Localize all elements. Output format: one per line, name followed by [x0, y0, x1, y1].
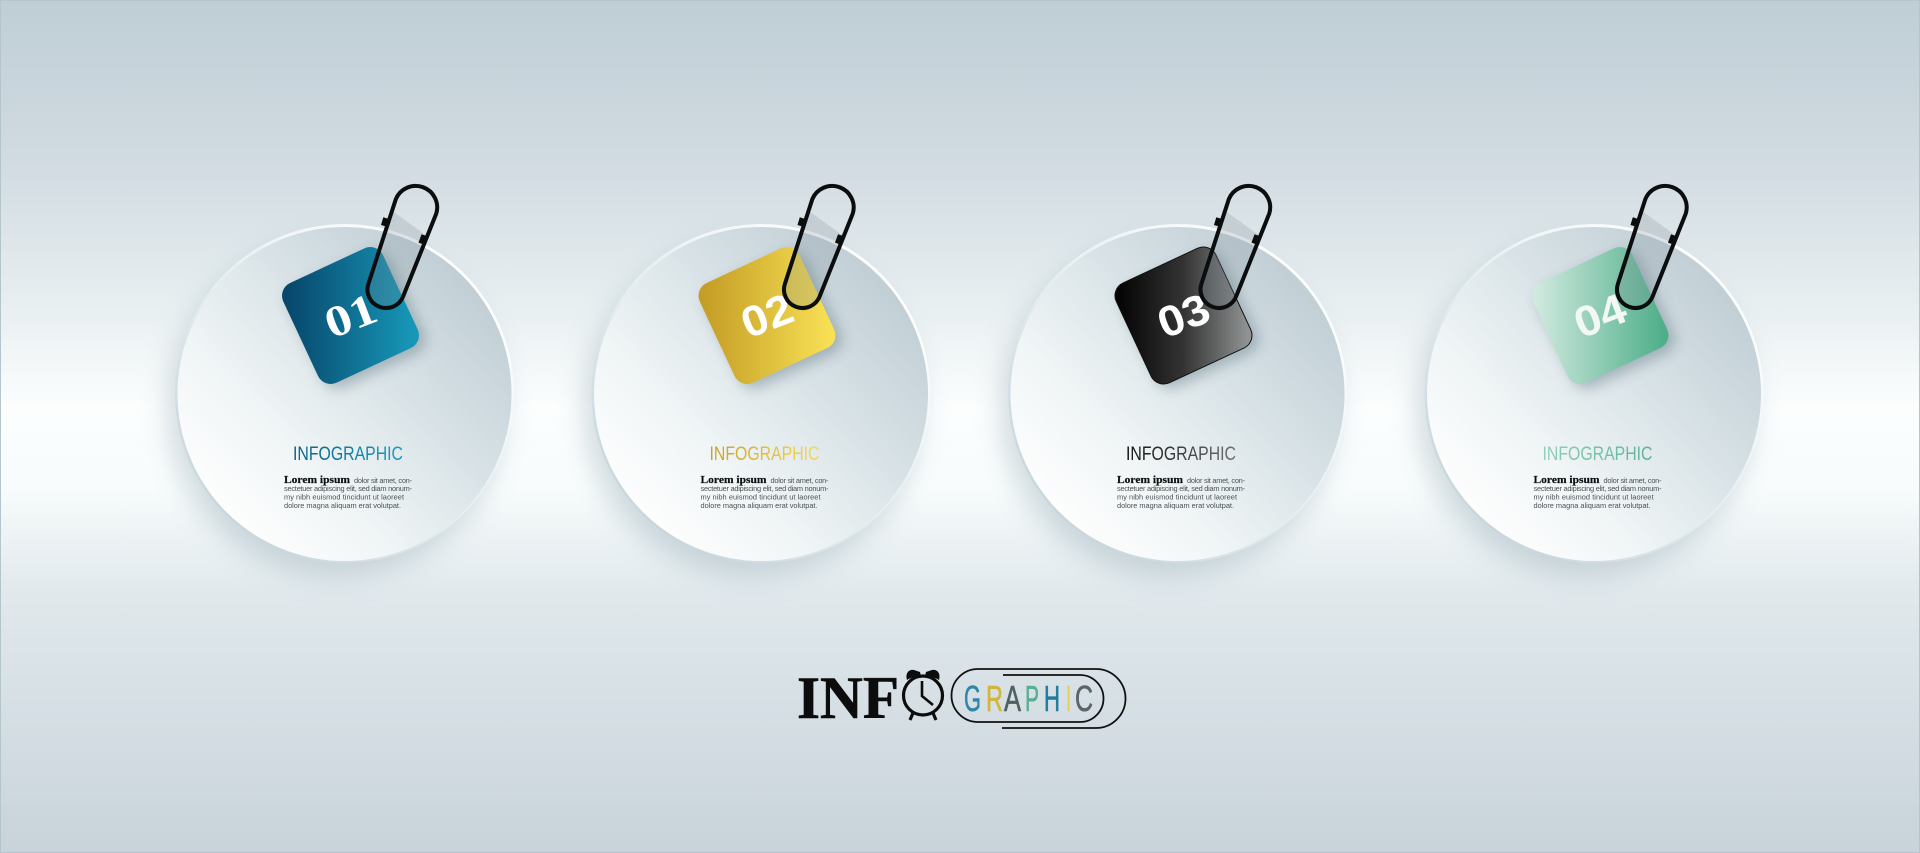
- step 2 body text: dolor sit amet, con-: [770, 476, 829, 485]
- step 3 panel: [1001, 186, 1347, 576]
- step 3 heading: INFOGRAPHIC: [1126, 443, 1236, 465]
- logo word GRAPHIC: A: [1004, 678, 1021, 719]
- bottom logo: [797, 665, 1126, 731]
- step 3 body text: dolor sit amet, con-: [1187, 476, 1246, 485]
- step 2 number: 02: [734, 285, 800, 348]
- step 3 paperclip: [1200, 186, 1270, 308]
- step 1 body text: my nibh euismod tincidunt ut laoreet: [284, 492, 404, 502]
- step 1 paperclip: [367, 186, 437, 308]
- step 1 body text: [284, 475, 413, 510]
- step 4 disc: [1424, 224, 1764, 563]
- step 4 paperclip: [1617, 186, 1687, 308]
- step 4 heading: INFOGRAPHIC: [1542, 443, 1652, 465]
- step 2 paperclip: [784, 186, 854, 308]
- step 1 heading: INFOGRAPHIC: [293, 443, 403, 465]
- step 1 body text: dolor sit amet, con-: [354, 476, 413, 485]
- logo word GRAPHIC: R: [986, 678, 1003, 719]
- step 3 disc: [1008, 224, 1347, 563]
- step 1 body text: dolore magna aliquam erat volutpat.: [284, 501, 401, 510]
- step 3 body text: [1117, 475, 1246, 510]
- step 3 body text: dolore magna aliquam erat volutpat.: [1117, 501, 1234, 510]
- step 3 number: 03: [1151, 285, 1217, 348]
- step 2 heading: INFOGRAPHIC: [710, 443, 820, 465]
- logo word GRAPHIC: [964, 678, 1093, 719]
- step 2 disc: [592, 224, 930, 563]
- step 2 number tile: [694, 241, 847, 395]
- logo word GRAPHIC: H: [1044, 678, 1060, 719]
- step 4 body text: dolore magna aliquam erat volutpat.: [1534, 501, 1650, 510]
- step 1 disc: [175, 224, 514, 563]
- step 3 body text: sectetuer adipiscing elit, sed diam nonum-: [1117, 484, 1246, 493]
- step 1 number tile: [277, 241, 430, 395]
- step 4 body text: [1534, 475, 1662, 510]
- step 4 body text: Lorem ipsum: [1534, 475, 1600, 486]
- step 4 body text: sectetuer adipiscing elit, sed diam nonum-: [1534, 484, 1662, 493]
- logo word INF: INF: [797, 665, 899, 731]
- step 3 body text: Lorem ipsum: [1117, 475, 1184, 486]
- step 4 number: 04: [1567, 285, 1633, 348]
- step 2 body text: dolore magna aliquam erat volutpat.: [700, 501, 818, 510]
- icon: large paperclip outline: [952, 669, 1126, 728]
- icon: alarm clock: [904, 670, 942, 720]
- logo word GRAPHIC: P: [1025, 678, 1039, 719]
- step 2 body text: my nibh euismod tincidunt ut laoreet: [700, 492, 820, 502]
- logo word GRAPHIC: G: [964, 678, 981, 719]
- step 3 body text: my nibh euismod tincidunt ut laoreet: [1117, 492, 1237, 502]
- step 2 body text: sectetuer adipiscing elit, sed diam nonum-: [700, 484, 829, 493]
- step 2 panel: [584, 186, 930, 576]
- step 3 number tile: [1110, 241, 1263, 395]
- step 1 body text: Lorem ipsum: [284, 475, 351, 486]
- step 1 number: 01: [318, 284, 384, 348]
- step 2 body text: [700, 475, 829, 510]
- step 1 panel: [168, 186, 514, 576]
- logo word GRAPHIC: I: [1066, 678, 1071, 719]
- step 4 body text: my nibh euismod tincidunt ut laoreet: [1534, 492, 1654, 502]
- step 1 body text: sectetuer adipiscing elit, sed diam nonum-: [284, 484, 413, 493]
- step 4 number tile: [1527, 241, 1680, 395]
- step 4 panel: [1418, 186, 1764, 576]
- step 2 body text: Lorem ipsum: [700, 475, 767, 486]
- step 4 body text: dolor sit amet, con-: [1604, 476, 1662, 485]
- logo word GRAPHIC: C: [1075, 678, 1093, 719]
